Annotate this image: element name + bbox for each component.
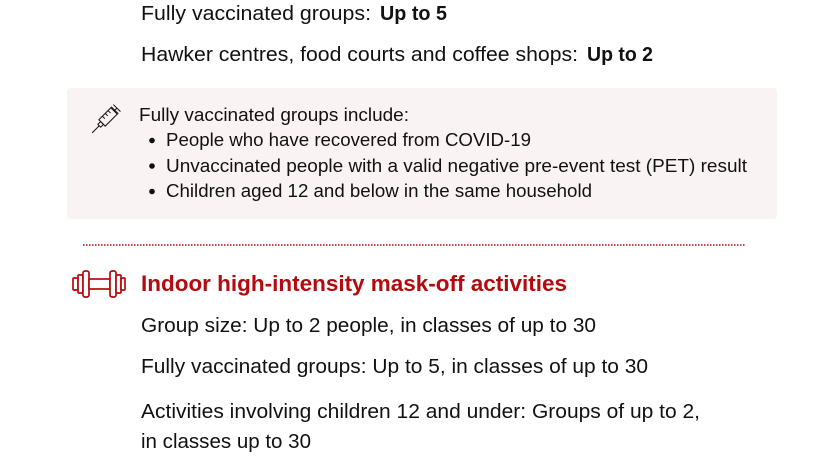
- text: children activity limit: Activities involving children 12 and under: Groups of up to 2,: [141, 401, 700, 423]
- list: included groups: People who have recovered from COVID-19: [166, 130, 531, 150]
- text: children activity limit: in classes up to 30: [141, 431, 311, 453]
- list: included groups: [149, 130, 747, 201]
- list: included groups: Children aged 12 and below in the same household: [166, 181, 592, 201]
- text: group size: Group size: Up to 2 people, in classes of up to 30: [141, 315, 596, 337]
- panel: fully vaccinated groups note: [67, 88, 777, 219]
- list: included groups: Unvaccinated people with a valid negative pre-event test (PET) result: [166, 156, 747, 176]
- icon: syringe: [89, 105, 120, 136]
- text: hawker centre limit: Up to 2: [587, 44, 653, 66]
- text: fully vaccinated group limit: Fully vaccinated groups:: [141, 3, 371, 25]
- text: fully vaccinated group limit: Up to 5: [380, 3, 447, 25]
- heading: indoor high-intensity activities: Indoor high-intensity mask-off activities: [141, 271, 567, 296]
- icon: dumbbell: [73, 271, 125, 297]
- text: fully vaccinated class limit: Fully vaccinated groups: Up to 5, in classes of up to 30: [141, 356, 648, 378]
- text: children activity limit: [141, 401, 700, 453]
- text: hawker centre limit: Hawker centres, food courts and coffee shops:: [141, 44, 578, 66]
- text: note intro: Fully vaccinated groups include:: [139, 105, 409, 125]
